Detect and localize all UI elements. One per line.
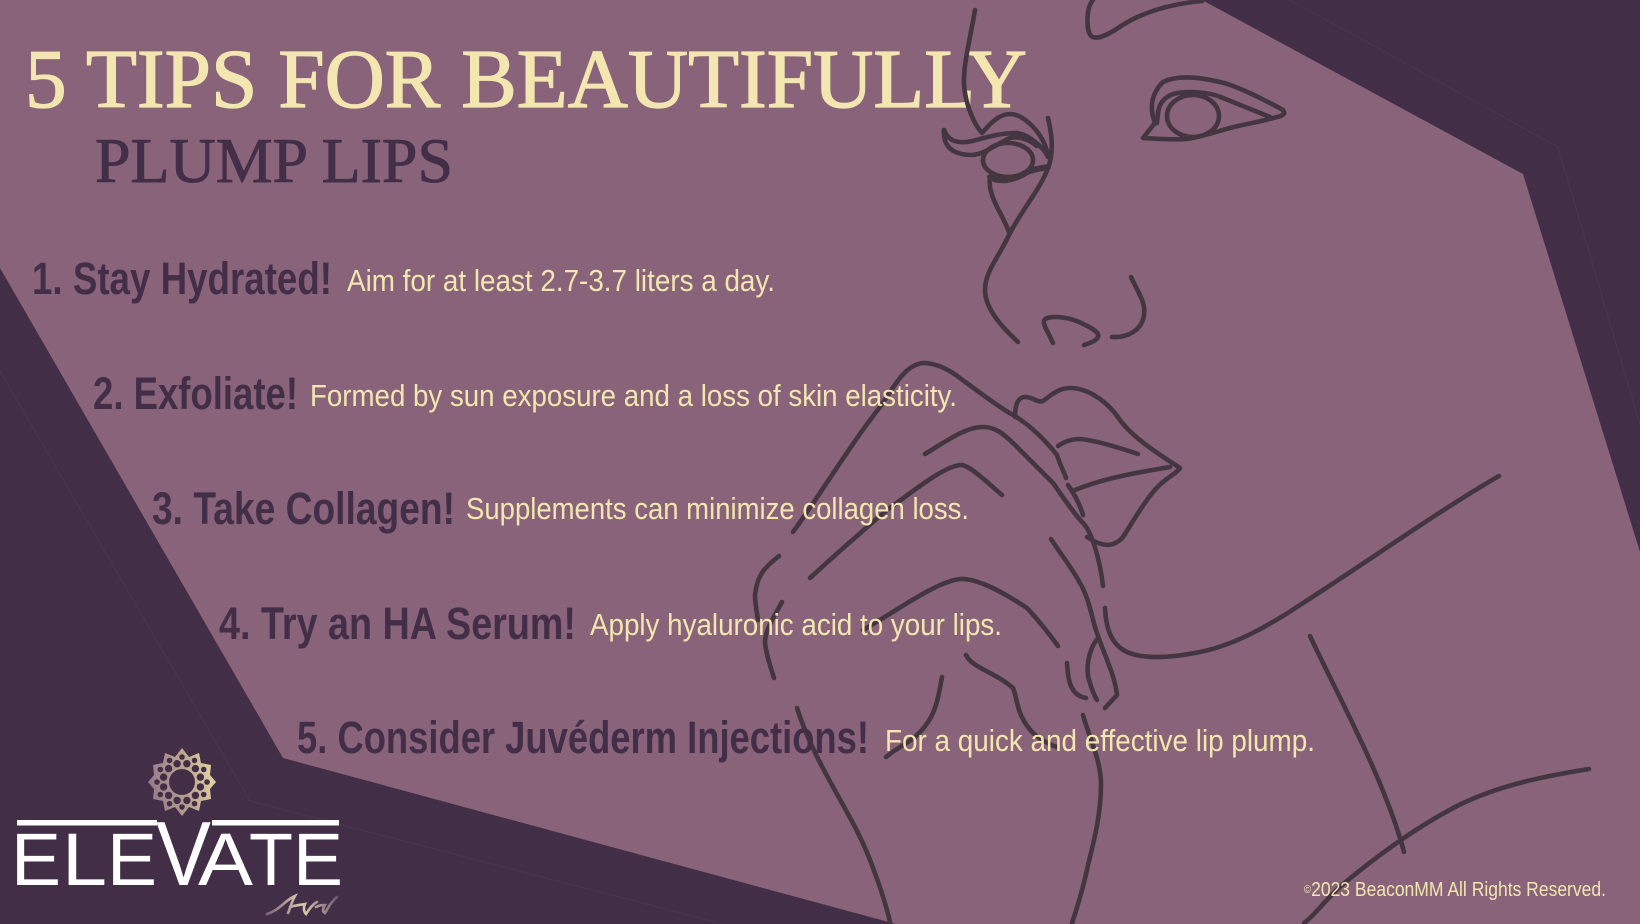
logo flourish bbox=[267, 896, 337, 914]
bottom-left dark corner shape bbox=[0, 268, 896, 924]
tip 1: Aim for at least 2.7-3.7 liters a day. bbox=[347, 263, 775, 298]
logo wordmark: E bbox=[293, 818, 343, 901]
logo: Elevate bbox=[11, 748, 343, 914]
tip 2: Formed by sun exposure and a loss of skin elasticity. bbox=[310, 378, 957, 413]
tip 4 bbox=[219, 598, 1002, 649]
tip 5 bbox=[297, 712, 1315, 763]
logo wordmark: T bbox=[249, 818, 293, 901]
title: 5 TIPS FOR BEAUTIFULLY bbox=[25, 33, 1027, 126]
tip 4: 4. Try an HA Serum! bbox=[219, 598, 576, 649]
logo wordmark bbox=[11, 804, 343, 905]
logo wordmark: L bbox=[62, 818, 107, 901]
tip 4: Apply hyaluronic acid to your lips. bbox=[590, 607, 1002, 642]
logo wordmark: E bbox=[107, 818, 157, 901]
tip 5: 5. Consider Juvéderm Injections! bbox=[297, 712, 869, 763]
logo wordmark: A bbox=[198, 818, 254, 901]
tip 3: Supplements can minimize collagen loss. bbox=[466, 491, 969, 526]
tip 1 bbox=[32, 253, 775, 304]
top-right dark corner shape bbox=[1202, 0, 1640, 552]
line art: face and hand bbox=[755, 0, 1589, 923]
tip 5: For a quick and effective lip plump. bbox=[885, 723, 1315, 758]
logo wordmark: V bbox=[156, 804, 211, 905]
icon: mandala emblem bbox=[148, 748, 216, 816]
logo wordmark: E bbox=[11, 818, 61, 901]
tip 3: 3. Take Collagen! bbox=[152, 483, 455, 534]
tip 2 bbox=[93, 368, 957, 419]
tip 1: 1. Stay Hydrated! bbox=[32, 253, 332, 304]
tip 3 bbox=[152, 483, 969, 534]
copyright: 2023 BeaconMM All Rights Reserved. bbox=[1311, 879, 1606, 901]
subtitle: PLUMP LIPS bbox=[95, 126, 453, 196]
copyright: © bbox=[1304, 884, 1311, 896]
tip 2: 2. Exfoliate! bbox=[93, 368, 298, 419]
